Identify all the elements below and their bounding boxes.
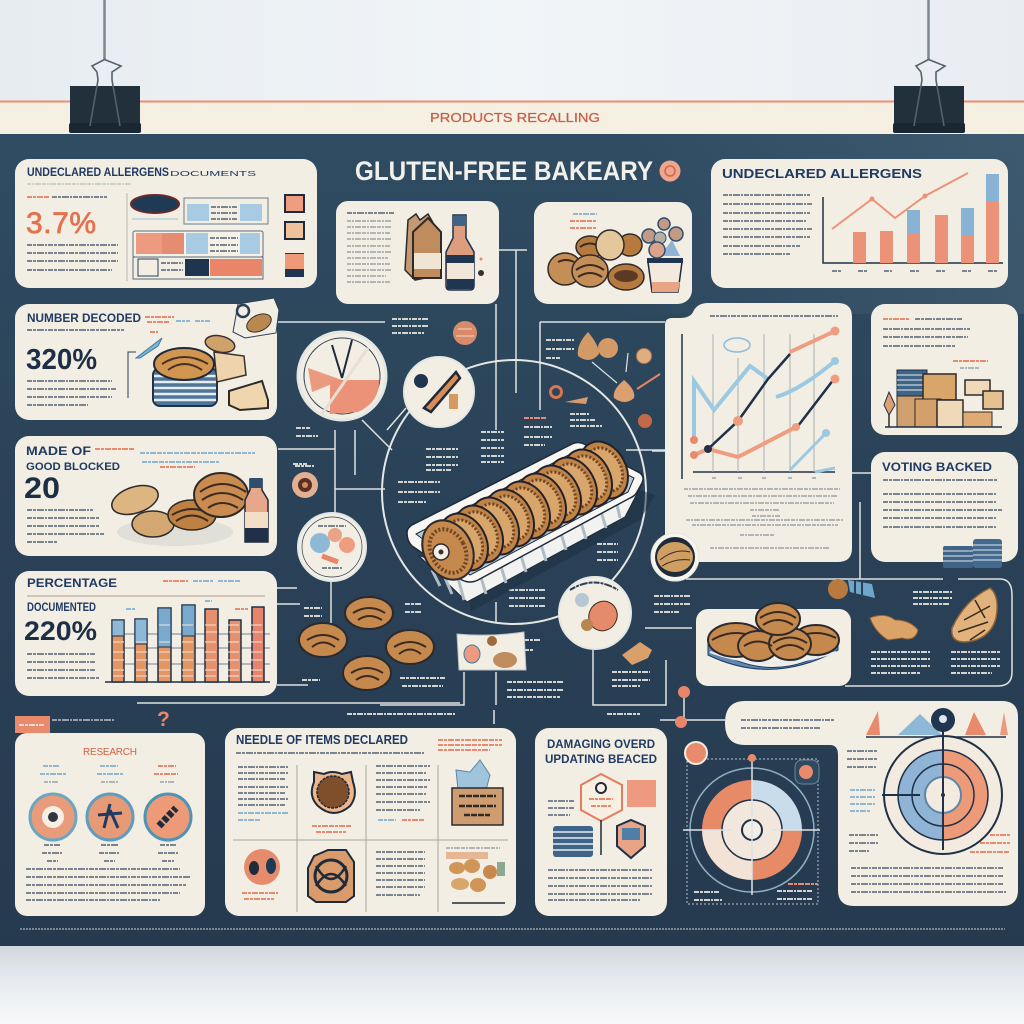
panel: number declared [15,298,279,420]
heading: NUMBER DECODED [27,311,141,325]
stat: 220% [24,616,97,646]
bowl disc left [298,513,366,581]
stat: 3.7% [26,207,96,240]
warning triangles [866,708,1008,737]
icon: pastry tray [446,848,505,903]
icon: badge [308,850,354,902]
line chart [682,326,840,479]
board [0,134,1024,946]
heading [710,315,838,317]
loose cookies [292,472,652,690]
icon: striped block [553,826,593,857]
title: GLUTEN-FREE BAKEARY [355,156,653,186]
panel: target chart with triangles [725,701,1018,906]
panel: crates [871,304,1018,435]
orange cake motif near top [453,321,477,345]
heading: VOTING BACKED [882,460,992,474]
icon: node connector [675,686,690,728]
panel: percent bar chart: DOCUMENTED [27,602,96,614]
heading: NEEDLE OF ITEMS DECLARED [236,733,408,747]
panel: rolls and pastries [696,603,851,686]
bread stack illustration [153,333,268,410]
three circular icons [30,766,191,861]
small ingredient cluster [550,332,660,428]
bars and trend [823,173,1003,271]
heading: UNDECLARED ALLERGENS [27,165,169,179]
heading: MADE OF [26,444,91,458]
panel: made of [15,436,277,556]
foil tray with rolls [407,433,655,612]
icon: title badge [660,160,680,182]
ginger and croissant [870,588,997,642]
plate of rolls [708,603,839,669]
icon: knife [136,338,162,358]
bar chart [105,605,270,682]
spice disc right of tray [559,577,631,649]
panel: allergens line-bar chart [711,159,1008,288]
tray shadow [470,490,655,612]
right binder clip [893,0,965,133]
tray wall [418,488,640,602]
panel: made of: GOOD BLOCKED [26,461,120,473]
flower motif [292,472,318,498]
heading: DAMAGING OVERD [547,737,655,751]
tray rim [407,442,643,582]
pastries illustration [108,473,268,546]
panel: pastries card [534,202,692,304]
stat: 320% [26,344,97,376]
heading: UNDECLARED ALLERGENS [722,166,922,181]
panel: percent bar chart [15,571,277,696]
icon: sample tag [233,298,279,338]
pastry [622,642,652,665]
icon: shield [617,820,645,858]
bullseye chart [882,728,1002,854]
heading: RESEARCH [83,747,137,758]
panel: multi-line chart [665,303,852,562]
chart labels [847,751,878,767]
cup with garnish [642,218,683,292]
label table [133,198,268,279]
panel: production overview: UPDATING BEACED [545,752,657,766]
top-left pie disc [298,332,386,420]
panel: research eyes [15,716,205,916]
header label: PRODUCTS RECALLING [430,110,600,125]
white captions right of rolls panel [871,592,1000,673]
small white captions around the tray [293,319,690,714]
magnified rolling pin disc [404,357,474,427]
icon: coral disc [244,849,280,885]
top header strip [0,100,1024,134]
icon: blue stack [943,539,1002,568]
icon: shopping bag [452,760,503,825]
lower wall shadow [0,946,1024,1024]
crates illustration [884,370,1003,427]
stat: 20 [24,472,60,505]
bottom dotted line [20,928,1005,930]
central circle [382,360,646,624]
rolls back to front [412,433,638,589]
icon: question mark: ? [157,708,170,731]
small recipe card [457,632,526,670]
walnut disc [651,533,699,581]
left binder clip [69,0,141,133]
oval product label [131,195,179,213]
panel: undeclared allergens stat: DOCUMENTS [170,171,257,178]
corner tag [15,716,50,733]
panel: production overview [535,728,667,916]
panel: packaging card [336,201,499,304]
icon: round cookie [312,772,355,813]
target chart on dark board [683,742,820,904]
panel: middle grid [225,728,516,916]
icon: hexagon badge [581,774,622,821]
heading: PERCENTAGE [27,576,117,590]
icon: striped fish [828,579,875,599]
panel: voting backed [871,452,1018,568]
icon: pin [685,742,707,764]
connector lines [137,250,1012,724]
icon: gear badge [795,760,819,784]
side swatches [285,195,304,277]
bottle and bag illustration [405,214,474,290]
tray interior [416,450,634,575]
panel: undeclared allergens stat [15,159,317,288]
rolls illustration [548,230,644,290]
